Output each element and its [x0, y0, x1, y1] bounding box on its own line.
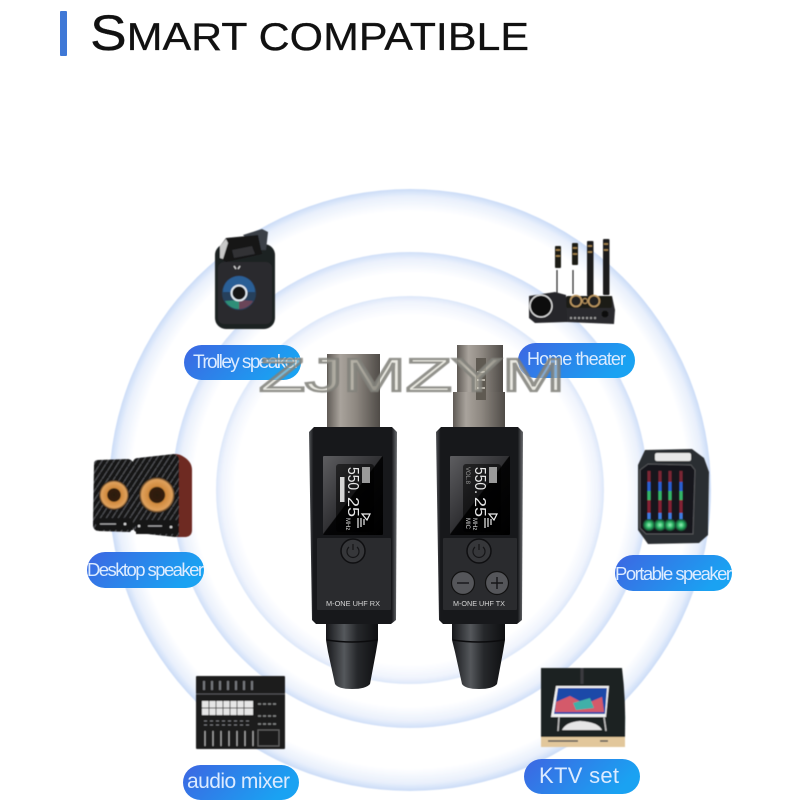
label: trolley speaker: Trolley speaker — [193, 352, 301, 373]
TX screen: 550. — [471, 467, 488, 494]
device: RX receiver — [309, 354, 397, 689]
RX control panel — [317, 538, 391, 610]
label: home theater: Home theater — [527, 349, 626, 369]
title accent bar — [60, 11, 67, 56]
label: desktop speaker: Desktop speaker — [87, 559, 204, 580]
RX screen: 550. — [344, 467, 361, 494]
concentric signal rings — [109, 189, 711, 791]
label: KTV set: KTV set — [539, 763, 619, 788]
label: desktop speaker — [87, 552, 204, 588]
label: KTV set — [524, 759, 640, 794]
TX screen: VOL.8 — [464, 467, 470, 485]
TX screen — [450, 456, 510, 535]
TX screen: 25 — [471, 497, 488, 517]
RX model text: M-ONE UHF RX — [326, 601, 380, 608]
RX screen: MHz — [344, 518, 350, 530]
TX control panel — [443, 538, 517, 610]
RX power button — [341, 539, 365, 563]
icon: trolley speaker — [215, 229, 275, 329]
watermark: ZJMZYM — [259, 349, 565, 401]
label: portable speaker: Portable speaker — [615, 563, 732, 584]
label: audio mixer: audio mixer — [187, 770, 290, 793]
title: SMART COMPATIBLE — [90, 5, 529, 61]
TX screen: MIC — [464, 518, 470, 530]
device: TX transmitter — [436, 345, 523, 689]
RX XLR metal connector — [327, 354, 380, 428]
TX screen: MHz — [471, 518, 477, 530]
label: portable speaker — [615, 555, 732, 591]
RX body — [309, 427, 397, 624]
icon: desktop speakers — [93, 454, 192, 537]
TX model text: M-ONE UHF TX — [453, 601, 505, 608]
TX XLR metal connector — [453, 345, 505, 428]
TX minus button — [452, 572, 474, 594]
icon: home theater — [529, 239, 615, 324]
label: audio mixer — [183, 765, 299, 800]
icon: KTV set — [541, 668, 625, 747]
label: trolley speaker — [184, 345, 301, 380]
RX XLR rear plug — [326, 622, 378, 689]
TX XLR rear plug — [452, 622, 505, 689]
icon: audio mixer — [196, 676, 285, 749]
TX power button — [467, 539, 491, 563]
RX screen — [323, 456, 383, 535]
TX body — [436, 427, 523, 624]
RX screen: 25 — [344, 497, 361, 517]
icon: portable speaker — [638, 449, 709, 544]
TX plus button — [486, 572, 508, 594]
label: home theater — [518, 343, 635, 378]
